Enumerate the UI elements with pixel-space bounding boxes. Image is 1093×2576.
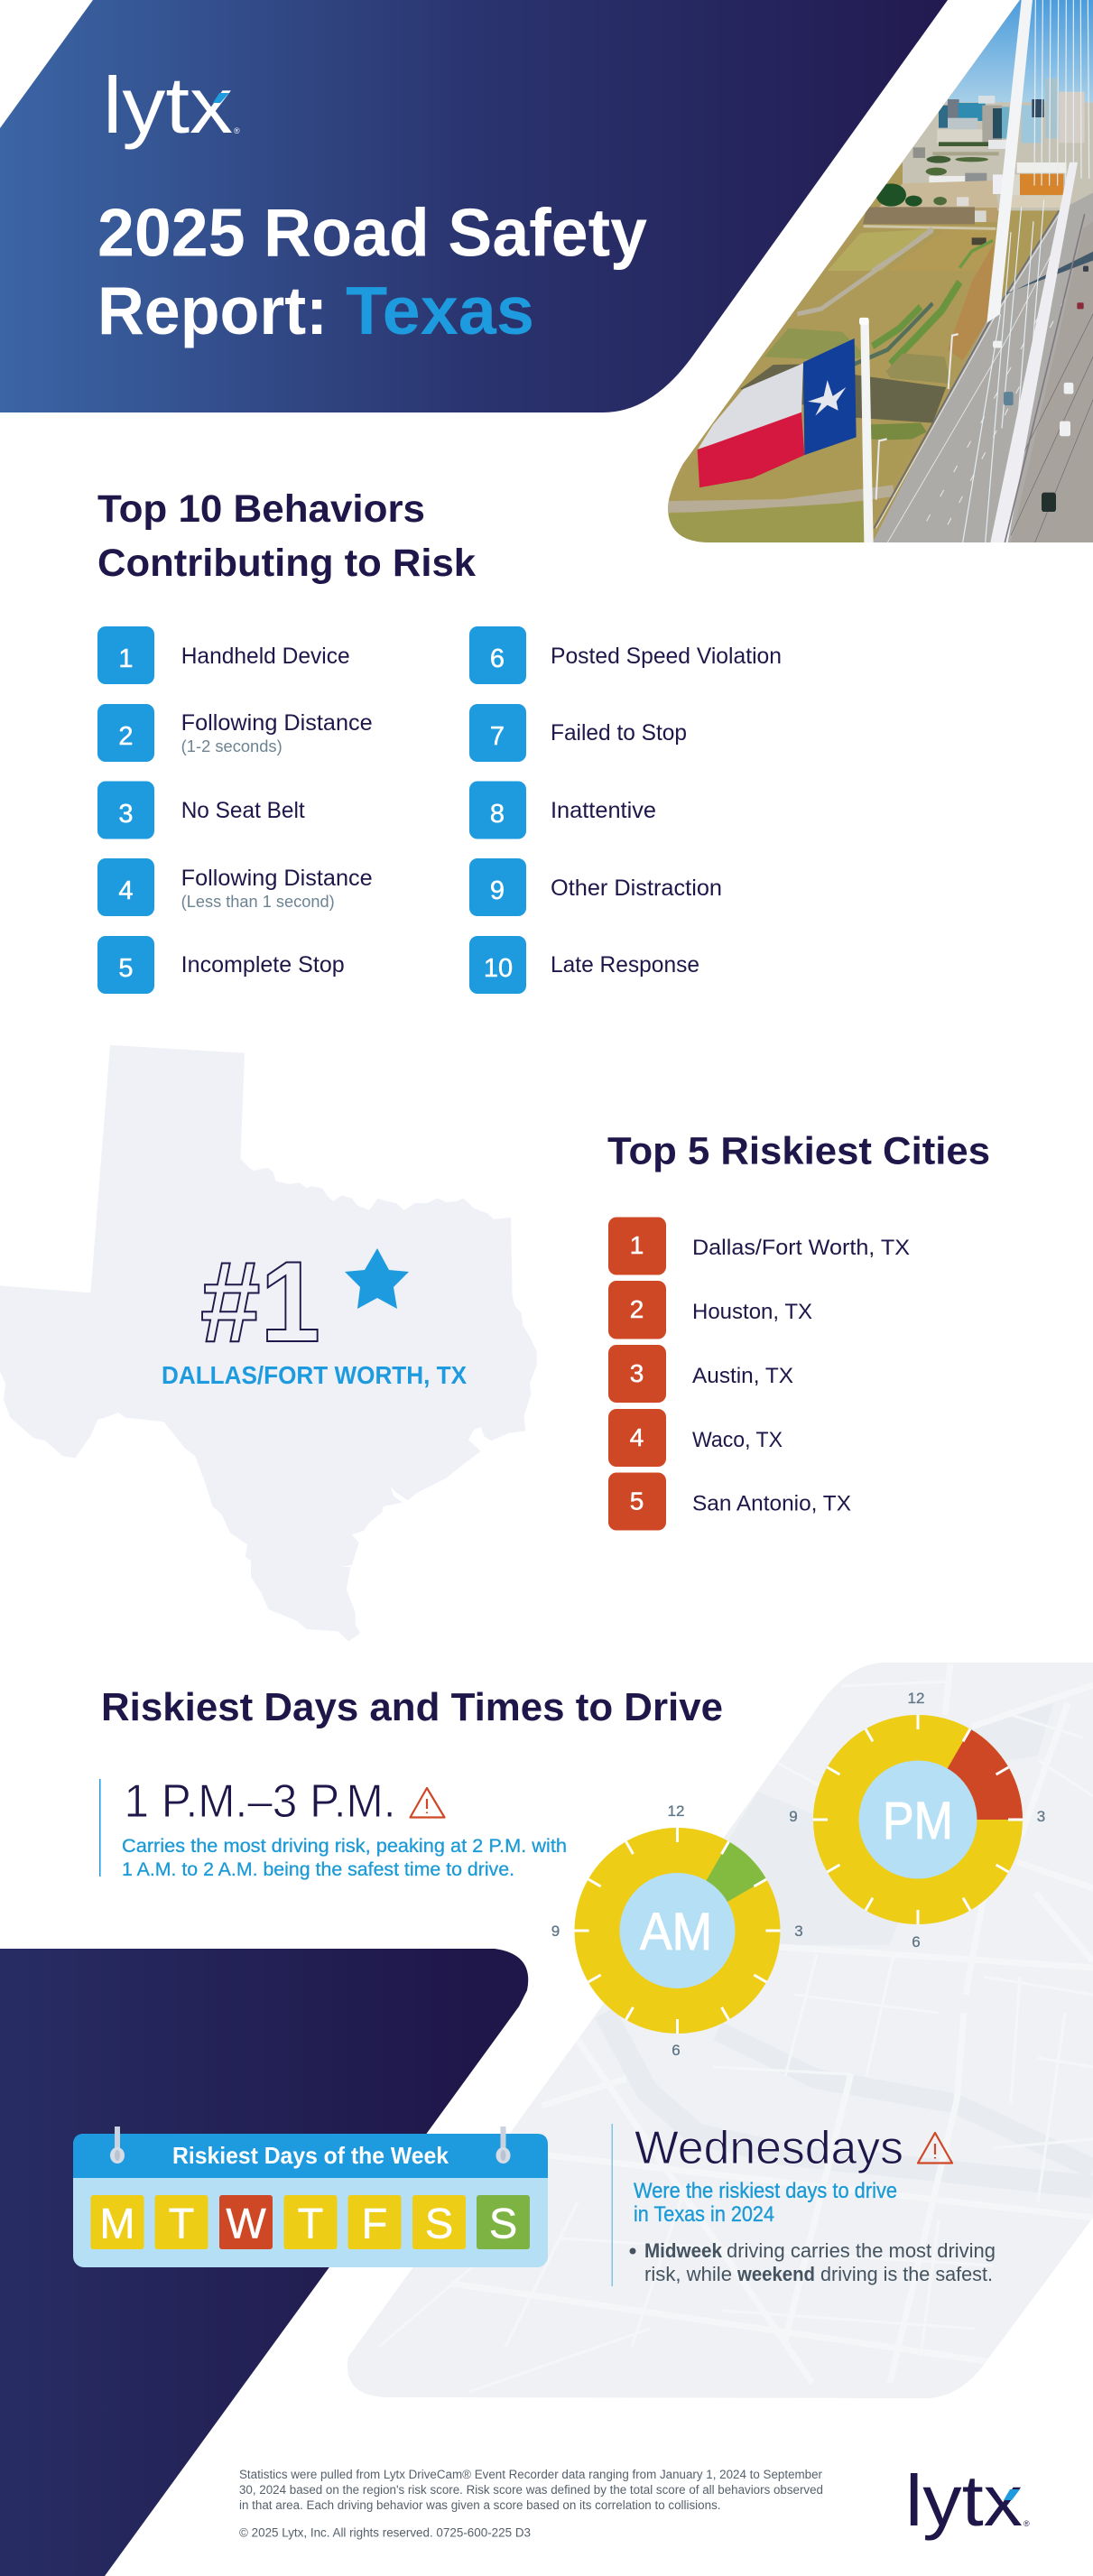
label: top city: DALLAS/FORT WORTH, TX: [162, 1361, 467, 1389]
title: [97, 195, 647, 348]
logo: lytx white: ®: [234, 126, 240, 135]
callout: riskiest day: in Texas in 2024: [634, 2202, 774, 2227]
street map background: [334, 1661, 1093, 2401]
day tile F: [348, 2195, 401, 2249]
list item 4: (Less than 1 second): [181, 893, 335, 911]
list item 4: [97, 858, 373, 916]
city 2: Houston, TX: [692, 1300, 812, 1324]
icon: star: [345, 1248, 409, 1309]
clock: PM: 3: [1037, 1808, 1045, 1825]
callout: riskiest time: 1 P.M.–3 P.M.: [125, 1775, 395, 1828]
list item 1: 1: [118, 644, 134, 673]
callout: riskiest day: [612, 2122, 996, 2286]
ranking: number 1 outline: #1: [200, 1237, 320, 1366]
list item 10: 10: [484, 954, 513, 983]
city 2: [608, 1281, 812, 1339]
day tile W: [219, 2195, 273, 2249]
clock: PM: 12: [908, 1690, 924, 1707]
title: Report:: [97, 273, 328, 348]
list item 2: (1-2 seconds): [181, 737, 283, 755]
footnote: in that area. Each driving behavior was given a score based on its correlation to collisions.: [239, 2498, 720, 2512]
callout: riskiest day: Wednesdays: [634, 2122, 903, 2174]
list item 2: 2: [118, 722, 134, 751]
list item 5: 5: [118, 954, 134, 983]
list item 7: 7: [490, 722, 505, 751]
day tile T: T: [298, 2199, 323, 2247]
icon: calendar rings: [110, 2127, 511, 2164]
list item 7: [469, 704, 687, 762]
callout: riskiest day: driving carries the most driving: [727, 2239, 996, 2262]
list item 10: Late Response: [551, 952, 699, 978]
list item 2: [97, 704, 373, 762]
header banner: [0, 0, 948, 412]
day tile M: [90, 2195, 144, 2249]
clock: AM: 6: [672, 2042, 681, 2059]
city 1: [608, 1217, 910, 1274]
list item 5: Incomplete Stop: [181, 952, 345, 978]
clock: AM: 9: [551, 1923, 560, 1940]
callout: riskiest time: 1 A.M. to 2 A.M. being the safest time to drive.: [122, 1858, 514, 1880]
logo: lytx navy: ®: [1024, 2519, 1030, 2528]
clock: PM: 9: [789, 1808, 798, 1825]
list item 7: Failed to Stop: [551, 720, 687, 746]
list item 8: 8: [490, 800, 505, 829]
day tile T: [283, 2195, 338, 2249]
list item 6: 6: [490, 644, 505, 673]
heading: top 10 behaviors: Contributing to Risk: [97, 542, 476, 585]
city 1: 1: [630, 1231, 644, 1259]
logo: lytx navy: lytx: [905, 2460, 1023, 2541]
city 2: 2: [630, 1295, 644, 1323]
calendar: riskiest days of the week: [73, 2127, 548, 2267]
day tile S: S: [489, 2199, 517, 2247]
list item 4: 4: [118, 876, 134, 905]
callout: riskiest time: [99, 1775, 567, 1880]
list item 1: Handheld Device: [181, 644, 350, 669]
list item 8: Inattentive: [551, 798, 656, 823]
heading: riskiest days and times: Riskiest Days and Times to Drive: [101, 1685, 723, 1729]
city 5: 5: [630, 1487, 644, 1515]
callout: riskiest time: Carries the most driving risk, peaking at 2 P.M. with: [122, 1835, 567, 1857]
day tile W: W: [226, 2199, 266, 2247]
day tile S: [412, 2195, 466, 2249]
day tile T: T: [169, 2199, 194, 2247]
list item 9: Other Distraction: [551, 876, 722, 901]
heading: top 10 behaviors: [97, 487, 476, 585]
icon: warning triangle: [410, 1788, 444, 1818]
calendar: riskiest days of the week: Riskiest Days of the Week: [172, 2142, 449, 2169]
day tile S: [477, 2195, 530, 2249]
city 3: [608, 1345, 793, 1403]
list item 10: [469, 936, 699, 994]
list item 3: No Seat Belt: [181, 798, 305, 823]
list item 8: [469, 782, 656, 839]
heading: top 10 behaviors: Top 10 Behaviors: [97, 487, 425, 531]
day tile F: F: [362, 2199, 387, 2247]
photo: Texas flag and Dallas bridge: [632, 0, 1093, 542]
callout: riskiest day: weekend: [736, 2263, 815, 2285]
list item 3: [97, 782, 305, 839]
map: Texas silhouette: [0, 1045, 537, 1642]
city 5: San Antonio, TX: [692, 1491, 851, 1516]
list item 4: Following Distance: [181, 866, 373, 891]
city 3: 3: [630, 1359, 644, 1387]
day tile T: [155, 2195, 208, 2249]
clock: AM: 3: [794, 1923, 803, 1940]
footnote: [239, 2468, 823, 2540]
callout: riskiest day: Were the riskiest days to drive: [634, 2179, 897, 2203]
clock: PM: PM: [883, 1792, 953, 1850]
city 4: Waco, TX: [692, 1428, 783, 1452]
day tile S: S: [425, 2199, 453, 2247]
title: 2025 Road Safety: [97, 195, 647, 271]
list item 6: [469, 626, 782, 684]
list item 2: Following Distance: [181, 710, 373, 736]
clock: AM: 12: [668, 1802, 684, 1820]
list item 9: 9: [490, 876, 505, 905]
navy lower panel: [0, 1949, 528, 2576]
city 3: Austin, TX: [692, 1364, 793, 1388]
list item 5: [97, 936, 345, 994]
day tile M: M: [99, 2199, 135, 2247]
callout: riskiest day: risk, while: [644, 2263, 732, 2285]
title: Texas: [346, 273, 534, 348]
footnote: Statistics were pulled from Lytx DriveCam® Event Recorder data ranging from January 1, 2024 to September: [239, 2468, 822, 2481]
callout: riskiest day: Midweek: [644, 2239, 723, 2262]
heading: top 5 riskiest cities: Top 5 Riskiest Cities: [607, 1130, 990, 1173]
clock: PM: 6: [912, 1933, 921, 1951]
footnote: © 2025 Lytx, Inc. All rights reserved. 0725-600-225 D3: [239, 2525, 531, 2540]
city 4: [608, 1409, 783, 1467]
list item 3: 3: [118, 800, 134, 829]
city 5: [608, 1473, 851, 1531]
clock: AM: AM: [640, 1903, 712, 1961]
list item 6: Posted Speed Violation: [551, 644, 782, 669]
city 1: Dallas/Fort Worth, TX: [692, 1236, 910, 1260]
city 4: 4: [630, 1423, 644, 1451]
list item 1: [97, 626, 350, 684]
logo: lytx white: lytx: [103, 60, 233, 150]
list item 9: [469, 858, 722, 916]
callout: riskiest day: driving is the safest.: [820, 2263, 993, 2285]
footnote: 30, 2024 based on the region's risk score. Risk score was defined by the total score of all behaviors observed: [239, 2483, 823, 2497]
icon: warning triangle: [918, 2133, 952, 2163]
clock: AM: [551, 1802, 803, 2059]
clock: PM: [789, 1690, 1045, 1951]
